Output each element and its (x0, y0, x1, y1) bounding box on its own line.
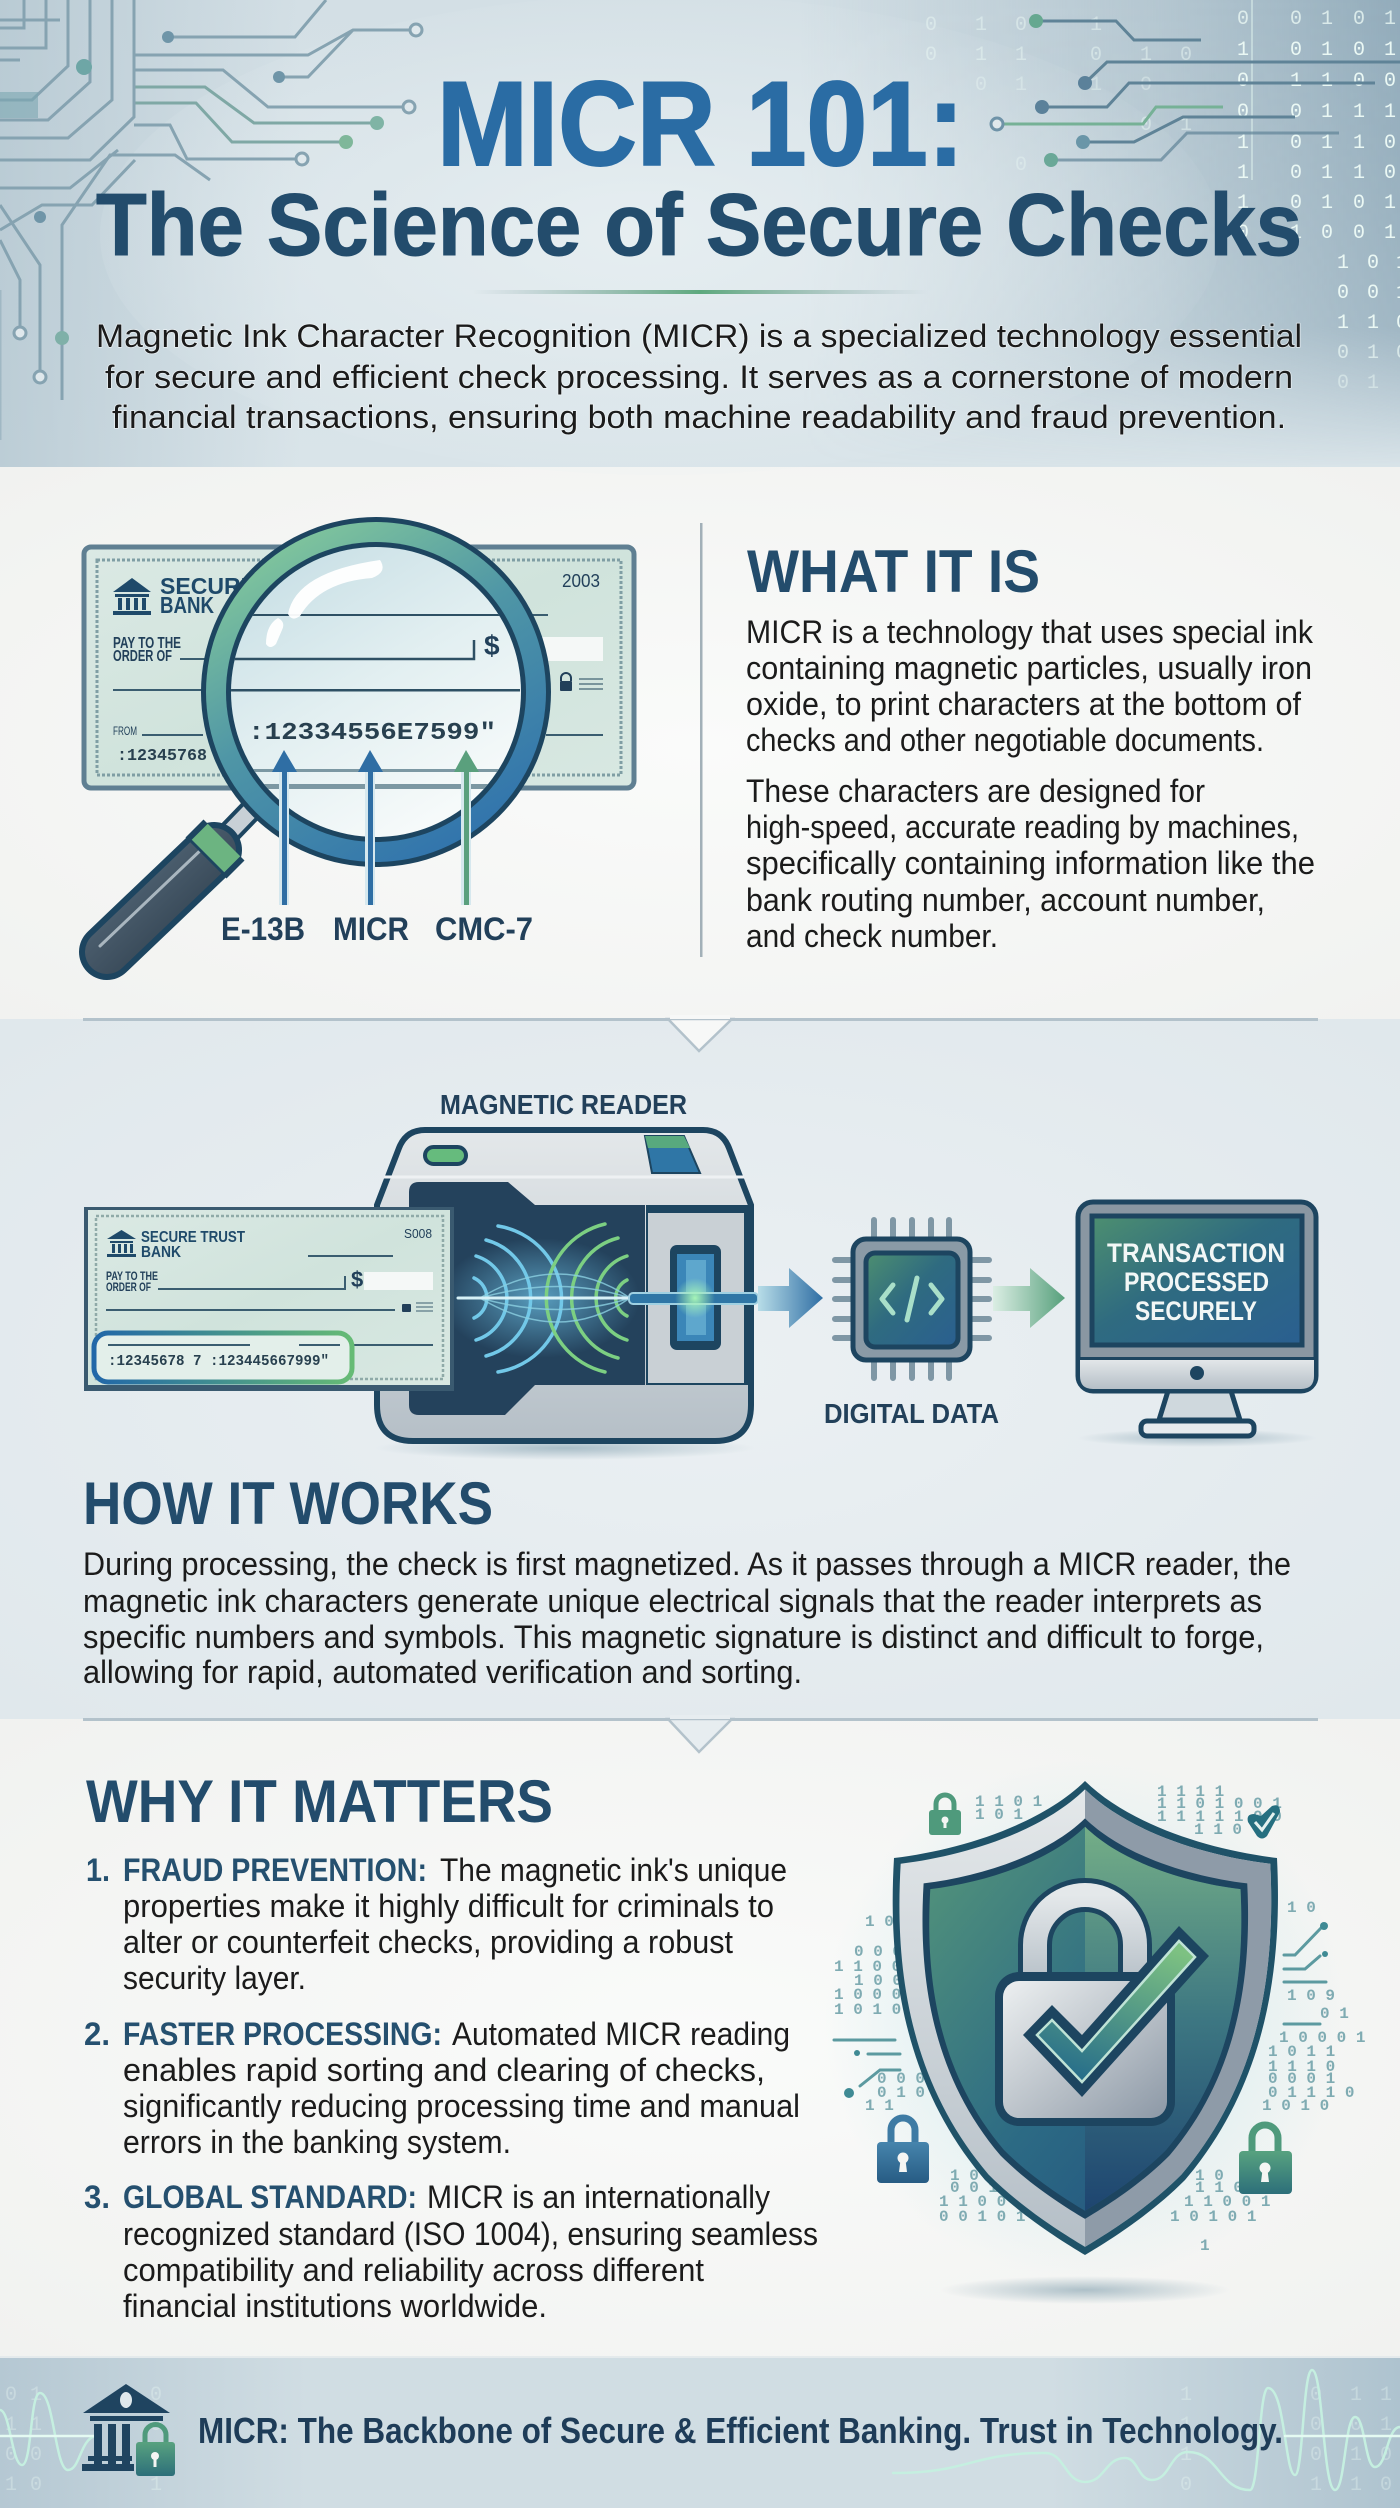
list item 1: fraud prevention: alter or counterfeit checks, providing a robust (123, 1924, 733, 1960)
binary data columns right: 01100 (1237, 70, 1396, 93)
icon: small check badge (1248, 1805, 1280, 1838)
sensor (670, 1245, 721, 1350)
lens contents: $ (484, 630, 500, 661)
check document: SECURE (160, 573, 256, 599)
illustration: check entering reader: S008 (404, 1226, 432, 1241)
binary digits around shield: 1 0 (950, 2167, 979, 2185)
intro text (96, 318, 1302, 435)
text block: how it works: magnetic ink characters generate unique electrical signals that the reader interprets as (83, 1583, 1262, 1619)
binary digits around shield: 1 0 0 0 1 (1279, 2029, 1365, 2047)
icon: bank small (107, 1230, 136, 1257)
MICR line magnified: :12334556E7599" (248, 720, 496, 747)
binary digits around shield: 1 1 (865, 2097, 894, 2115)
binary digits around shield: 1 1 0 1 0 0 1 (1157, 1795, 1282, 1813)
intro text: for secure and efficient check processing. It serves as a cornerstone of modern (105, 359, 1293, 395)
check document: PAY TO THE (113, 635, 181, 652)
circuit traces left (0, 0, 416, 440)
heading: why it matters: WHY IT MATTERS (86, 1768, 553, 1835)
notch pointer (668, 1019, 732, 1051)
binary digits around shield: 1 1 0 0 1 (1184, 2193, 1270, 2211)
list item 2: faster processing: 2. (84, 2016, 110, 2052)
list item 2: faster processing: errors in the banking system. (123, 2124, 511, 2160)
binary texture: 0011010 (5, 2444, 1392, 2467)
binary digits around shield: 0 0 0 1 (1268, 2070, 1335, 2088)
text block: how it works: specific numbers and symbols. This magnetic signature is distinct and difficult to forge, (83, 1619, 1264, 1655)
list item 3: global standard: recognized standard (ISO 1004), ensuring seamless (123, 2216, 818, 2252)
binary digits around shield: 1 0 (1287, 1899, 1316, 1917)
illustration: check entering reader: BANK (141, 1244, 181, 1261)
binary data columns right: 0110 (975, 74, 1152, 97)
binary digits around shield (834, 1783, 1365, 2255)
title: MICR 101: MICR 101: (437, 57, 964, 191)
binary texture (5, 2384, 1392, 2497)
illustration: check entering reader: $ (351, 1267, 363, 1292)
check mark (1023, 1926, 1209, 2097)
panel: what it is background and content (79, 517, 1314, 980)
check document: ORDER OF (113, 648, 172, 665)
arrow: reader to chip (758, 1268, 823, 1328)
icon: magnifying glass (100, 517, 551, 952)
text block: what it is first paragraph: MICR is a technology that uses special ink (746, 614, 1314, 650)
binary digits around shield: 1 1 1 1 1 0 0 (1157, 1808, 1282, 1826)
top tab (645, 1136, 700, 1173)
list item 3: global standard: compatibility and reliability across different (123, 2252, 704, 2288)
screen message: TRANSACTION (1107, 1238, 1285, 1268)
text block: how it works: allowing for rapid, automated verification and sorting. (83, 1654, 802, 1690)
highlighted MICR line (94, 1333, 352, 1382)
binary texture: 1101001 (5, 2414, 1392, 2437)
binary data columns right: 00101 (1237, 8, 1396, 31)
binary data columns right: 0 (1015, 154, 1027, 177)
screen message (1107, 1238, 1285, 1326)
binary digits around shield: 1 0 1 (975, 1806, 1023, 1824)
text block: what it is second paragraph: bank routing number, account number, (746, 882, 1265, 918)
binary data columns right: 10101 (1237, 192, 1396, 215)
binary digits around shield: 0 1 1 1 0 (1268, 2084, 1354, 2102)
icon: computer monitor (1077, 1202, 1317, 1447)
illustration: check entering reader: PAY TO THE (106, 1269, 158, 1283)
binary digits around shield: 1 0 1 0 1 (1170, 2208, 1256, 2226)
icon: blue lock (877, 2118, 929, 2183)
binary data columns right: 00111 (1237, 101, 1396, 124)
highlighted MICR line: :12345678 7 :123445667999" (108, 1353, 329, 1370)
label: MICR: MICR (333, 911, 409, 947)
indicator light (425, 1147, 466, 1164)
text block: what it is first paragraph: checks and other negotiable documents. (746, 722, 1264, 758)
icon: magnetic reader machine (375, 1130, 758, 1460)
list item 1: fraud prevention: FRAUD PREVENTION: (123, 1852, 427, 1888)
screen message: PROCESSED (1124, 1267, 1269, 1297)
binary digits around shield: 0 0 1 0 1 (939, 2208, 1025, 2226)
binary digits around shield: 1 0 (1195, 2167, 1224, 2185)
binary digits around shield: 1 1 0 (1194, 1821, 1242, 1839)
list item 2: faster processing: enables rapid sorting and clearing of checks, (123, 2052, 765, 2088)
shield body (893, 1781, 1278, 2255)
text block: what it is first paragraph: oxide, to print characters at the bottom of (746, 686, 1301, 722)
title: The Science of Secure Checks: The Science of Secure Checks (96, 175, 1302, 274)
binary data columns right: 01 (1337, 372, 1379, 395)
binary digits around shield: 1 1 1 1 (1157, 1783, 1224, 1801)
list item 1: fraud prevention: 1. (86, 1852, 110, 1888)
illustration: check entering reader: SECURE TRUST (141, 1229, 245, 1246)
binary digits around shield: 0 1 0 (877, 2084, 925, 2102)
label: CMC-7: CMC-7 (435, 911, 533, 947)
binary digits around shield: 1 0 1 0 2 (834, 2001, 920, 2019)
padlock (995, 1895, 1175, 2126)
notch pointer (668, 1719, 732, 1752)
icon: microchip digital data (835, 1220, 989, 1378)
list item 2: faster processing: FASTER PROCESSING: (123, 2016, 442, 2052)
illustration: check under magnifying glass (84, 517, 634, 952)
binary digits around shield: 1 0 1 0 (1262, 2097, 1329, 2115)
binary digits around shield: 1 0 1 1 (1268, 2043, 1335, 2061)
binary digits around shield: 1 0 0 (854, 1972, 902, 1990)
icon: small green lock top left (929, 1795, 961, 1835)
intro text: Magnetic Ink Character Recognition (MICR) is a specialized technology essential (96, 318, 1302, 354)
binary digits around shield: 1 (1200, 2237, 1210, 2255)
magnetic waves (440, 1224, 640, 1372)
binary digits around shield: 0 0 0 (854, 1943, 902, 1961)
icon: bank with padlock (82, 2384, 175, 2476)
icon: green lock (1239, 2125, 1292, 2194)
text block: what it is second paragraph: and check number. (746, 918, 998, 954)
check document (84, 547, 634, 788)
list item 3: global standard (84, 2179, 818, 2324)
heading: what it is: WHAT IT IS (747, 538, 1040, 605)
heading: how it works: HOW IT WORKS (83, 1470, 493, 1537)
text block: what it is second paragraph: specifically containing information like the (746, 845, 1315, 881)
list item 2: faster processing (84, 2016, 800, 2160)
list item 2: faster processing: significantly reducing processing time and manual (123, 2088, 800, 2124)
binary digits around shield: 1 1 0 0 0 (834, 1958, 920, 1976)
circuit traces around shield (834, 1928, 1326, 2086)
panel: how it works (0, 1015, 1400, 1719)
illustration: check entering reader (84, 1207, 454, 1391)
screen message: SECURELY (1135, 1296, 1257, 1326)
binary digits around shield: 1 0 0 0 (834, 1986, 901, 2004)
icon: small padlock (560, 673, 572, 691)
list item 1: fraud prevention (86, 1852, 787, 1996)
binary data columns right: 01001 (1237, 222, 1396, 245)
binary data columns right: 10110 (1237, 162, 1396, 185)
list item 1: fraud prevention: security layer. (123, 1960, 306, 1996)
text block: what it is first paragraph: containing magnetic particles, usually iron (746, 650, 1312, 686)
binary data columns right: 10101 (1237, 39, 1396, 62)
label: digital data: DIGITAL DATA (824, 1398, 999, 1429)
list item 1: fraud prevention: properties make it highly difficult for criminals to (123, 1888, 774, 1924)
binary digits around shield: 1 1 1 0 (1268, 2058, 1335, 2076)
list item 3: global standard: GLOBAL STANDARD: (123, 2179, 417, 2215)
binary digits around shield: 1 0 9 (1287, 1987, 1335, 2005)
binary data columns right: 011010 (925, 44, 1192, 67)
check document: BANK (160, 592, 214, 618)
list item 1: fraud prevention: The magnetic ink's unique (440, 1852, 787, 1888)
illustration: check entering reader: ORDER OF (106, 1280, 151, 1294)
binary data columns right: 10110 (1237, 132, 1396, 155)
list item 3: global standard: financial institutions worldwide. (123, 2288, 547, 2324)
binary texture: 0101011 (5, 2384, 1392, 2407)
illustration: security shield (825, 1760, 1365, 2304)
lens contents (231, 560, 520, 789)
text block: how it works (83, 1546, 1291, 1690)
list item 2: faster processing: Automated MICR reading (452, 2016, 790, 2052)
signal waves (0, 2370, 1400, 2490)
check document: 2003 (562, 571, 600, 591)
label: magnetic reader: MAGNETIC READER (440, 1089, 687, 1120)
binary texture: 1010110 (5, 2474, 1392, 2497)
arrow: CMC-7 (454, 750, 479, 905)
intro text: financial transactions, ensuring both machine readability and fraud prevention. (112, 399, 1286, 435)
check document: :12345768 (117, 747, 207, 766)
binary data columns right: 0101 (925, 14, 1102, 37)
binary digits around shield: 1 1 0 0 1 (939, 2193, 1025, 2211)
text block: what it is first paragraph (746, 614, 1314, 758)
arrow: chip to monitor (993, 1268, 1065, 1328)
binary data columns right: 01 (1140, 114, 1192, 137)
binary digits around shield: 1 1 0 1 (1195, 2179, 1262, 2197)
panel: why it matters (0, 1715, 1400, 2359)
binary digits around shield: 0 1 (1320, 2005, 1349, 2023)
text block: what it is second paragraph: high-speed, accurate reading by machines, (746, 809, 1299, 845)
binary digits around shield: 1 1 0 1 (975, 1793, 1042, 1811)
list item 3: global standard: MICR is an internationally (427, 2179, 770, 2215)
circuit traces right (997, 21, 1400, 160)
binary digits around shield: 0 0 1 (950, 2179, 998, 2197)
text block: what it is second paragraph (746, 773, 1315, 954)
arrow: MICR (358, 750, 383, 905)
text block: what it is second paragraph: These characters are designed for (746, 773, 1205, 809)
arrow: E-13B (272, 750, 297, 905)
icon: bank (113, 578, 151, 615)
binary data columns right (925, 0, 1400, 395)
text block: how it works: During processing, the check is first magnetized. As it passes through a MICR reader, the (83, 1546, 1291, 1582)
panel: footer banner (0, 2356, 1400, 2508)
binary digits around shield: 0 0 0 (877, 2070, 925, 2088)
panel: header (0, 0, 1400, 475)
check document: FROM (113, 724, 137, 738)
binary digits around shield: 1 0 (865, 1913, 894, 1931)
label: E-13B: E-13B (221, 911, 305, 947)
list item 3: global standard: 3. (84, 2179, 110, 2215)
